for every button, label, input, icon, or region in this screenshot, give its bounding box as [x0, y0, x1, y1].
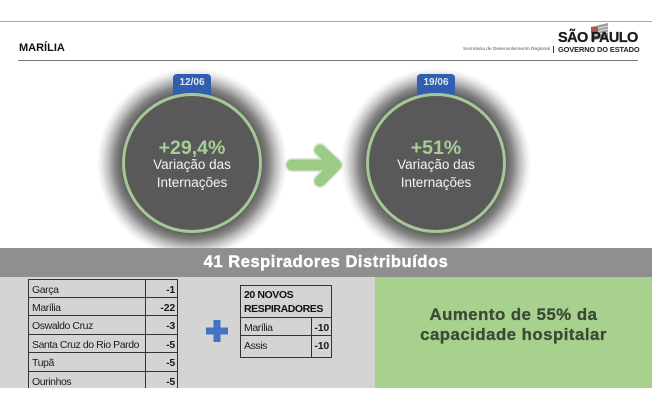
date tab: 12/06 [179, 77, 205, 88]
table: distribution: -5 [166, 339, 175, 351]
banner: respiradores [0, 248, 652, 277]
caption [153, 157, 231, 190]
caption: Variação das [397, 157, 475, 172]
banner: respiradores: 41 Respiradores Distribuídos [204, 253, 448, 271]
table: distribution: Oswaldo Cruz [32, 320, 93, 332]
logo wordmark: SÃO PAULO [558, 30, 638, 46]
caption: Internações [401, 175, 471, 190]
value: +51% [411, 137, 461, 159]
table: novos respiradores: -10 [314, 340, 329, 352]
top rule [0, 21, 652, 22]
panel: capacity callout: capacidade hospitalar [420, 325, 607, 344]
table: distribution: Marília [32, 302, 61, 314]
panel: capacity callout: Aumento de 55% da [430, 305, 597, 324]
date tab: 19/06 [423, 77, 449, 88]
date tab [173, 74, 211, 100]
logo subline: GOVERNO DO ESTADO [558, 45, 640, 54]
subtitle: secretaria: Secretaria de Desenvolvimento Regional [463, 47, 550, 52]
table: distribution: Tupã [32, 357, 54, 369]
table: distribution: -3 [166, 320, 175, 332]
table: novos respiradores: RESPIRADORES [244, 303, 323, 315]
caption: Variação das [153, 157, 231, 172]
table: distribution: Santa Cruz do Rio Pardo [32, 339, 139, 351]
caption [397, 157, 475, 190]
table: distribution: Garça [32, 284, 58, 296]
panel: capacity callout [375, 277, 652, 388]
table: novos respiradores: -10 [314, 322, 329, 334]
circle [122, 93, 262, 233]
table: distribution: -5 [166, 357, 175, 369]
logo divider [553, 46, 554, 53]
icon: plus [206, 320, 228, 342]
heading rule [18, 60, 638, 61]
panel: circle 12/06 [99, 70, 285, 248]
arrow [285, 143, 343, 188]
shadow halo [341, 68, 531, 258]
table: distribution: -5 [166, 376, 175, 388]
circle [366, 93, 506, 233]
table: distribution [28, 279, 178, 388]
date tab [417, 74, 455, 100]
icon: flag [591, 23, 608, 41]
caption: Internações [157, 175, 227, 190]
panel: circle 19/06 [343, 70, 529, 248]
logo: São Paulo government [463, 23, 640, 54]
table: novos respiradores: Marília [244, 322, 273, 334]
table: distribution: -22 [160, 302, 175, 314]
title: MARÍLIA [19, 42, 65, 54]
panel: lower grey [0, 277, 375, 388]
table: novos respiradores: Assis [244, 340, 267, 352]
value: +29,4% [159, 137, 225, 159]
table: novos respiradores: 20 NOVOS [244, 289, 293, 301]
shadow halo [97, 68, 287, 258]
table: distribution: Ourinhos [32, 376, 71, 388]
table: novos respiradores [240, 285, 332, 358]
table: distribution: -1 [166, 284, 175, 296]
